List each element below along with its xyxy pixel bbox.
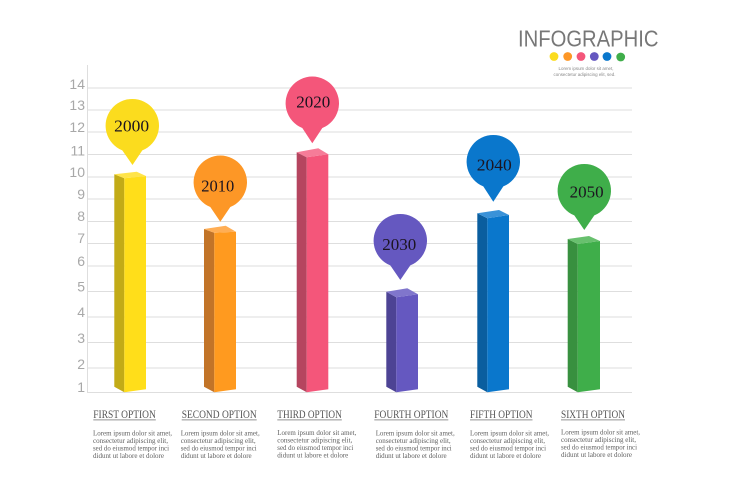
description: sed do eiusmod tempor inci (561, 442, 637, 452)
description: consectetur adipiscing elit, (181, 436, 256, 445)
option: second (181, 409, 260, 460)
description: didunt ut labore et dolore (181, 451, 252, 460)
y axis labels: 11 (70, 142, 85, 158)
pin: 2040 (467, 135, 520, 202)
description: didunt ut labore et dolore (561, 450, 633, 459)
option: fourth (374, 409, 455, 460)
bar: first option (114, 172, 146, 392)
y axis labels: 2 (77, 356, 85, 372)
title caption (554, 66, 616, 78)
bar: fourth option (386, 288, 418, 392)
pin: 2010 (194, 156, 247, 222)
description: Lorem ipsum dolor sit amet, (277, 428, 356, 437)
description: Lorem ipsum dolor sit amet, (470, 428, 549, 438)
description: didunt ut labore et dolore (470, 451, 542, 460)
y axis labels: 12 (69, 119, 85, 135)
pin: 2030: 2030 (382, 235, 416, 254)
pin: 2010: 2010 (201, 177, 234, 196)
option: third (277, 409, 356, 460)
description: Lorem ipsum dolor sit amet, (561, 428, 640, 436)
heading: FIRST OPTION (93, 409, 156, 421)
pin: 2000: 2000 (114, 116, 149, 136)
y axis labels: 3 (77, 330, 85, 346)
bar: second option (204, 226, 236, 392)
y axis labels: 7 (77, 230, 85, 246)
description (376, 428, 455, 460)
y axis labels: 13 (69, 97, 85, 113)
heading: THIRD OPTION (277, 409, 342, 421)
description (181, 428, 260, 460)
pin: 2020: 2020 (296, 92, 330, 111)
title caption: consectetur adipiscing elit, sed. (554, 72, 616, 78)
pin: 2050: 2050 (570, 183, 604, 202)
description: sed do eiusmod tempor inci (277, 443, 353, 452)
bar: third option (297, 148, 328, 392)
y axis labels: 14 (69, 76, 85, 92)
title block (518, 26, 659, 78)
heading: FOURTH OPTION (374, 409, 449, 421)
description (470, 428, 549, 460)
colour dots (550, 52, 625, 61)
description: sed do eiusmod tempor inci (376, 444, 452, 452)
description: consectetur adipiscing elit, (470, 436, 545, 445)
title: INFOGRAPHIC (518, 26, 659, 52)
description: Lorem ipsum dolor sit amet, (93, 428, 172, 438)
description: didunt ut labore et dolore (93, 451, 165, 460)
y axis labels: 5 (77, 279, 85, 295)
description (277, 428, 356, 460)
pin: 2020 (286, 77, 339, 143)
description: Lorem ipsum dolor sit amet, (181, 428, 260, 438)
y axis labels: 9 (77, 186, 85, 202)
heading: FIFTH OPTION (470, 409, 533, 421)
description: Lorem ipsum dolor sit amet, (376, 428, 455, 438)
y axis labels: 1 (77, 379, 85, 395)
description: consectetur adipiscing elit, (376, 436, 451, 445)
description (561, 428, 640, 459)
y axis labels: 8 (77, 208, 85, 224)
y axis labels: 6 (77, 253, 85, 269)
description: consectetur adipiscing elit, (93, 436, 168, 445)
pin: 2000 (106, 99, 159, 165)
description: consectetur adipiscing elit, (277, 436, 352, 444)
description: didunt ut labore et dolore (376, 451, 447, 460)
description: sed do eiusmod tempor inci (181, 444, 257, 452)
heading: SECOND OPTION (182, 409, 257, 421)
chart grid and axis (87, 65, 632, 393)
option: first (93, 409, 172, 460)
pin: 2030 (374, 214, 427, 280)
description: sed do eiusmod tempor inci (93, 444, 169, 452)
y axis labels: 4 (77, 304, 85, 320)
option: sixth (561, 409, 640, 459)
description: consectetur adipiscing elit, (561, 435, 636, 444)
heading: SIXTH OPTION (561, 409, 626, 421)
bar: sixth option (568, 236, 600, 392)
pin: 2050 (558, 164, 611, 230)
option: fifth (470, 409, 549, 460)
bar: fifth option (477, 210, 509, 392)
description: didunt ut labore et dolore (277, 450, 349, 460)
description (93, 428, 172, 460)
y axis labels (69, 76, 85, 395)
title caption: Lorem ipsum dolor sit amet, (558, 66, 614, 72)
y axis labels: 10 (69, 164, 85, 180)
pin: 2040: 2040 (477, 156, 512, 175)
description: sed do eiusmod tempor inci (470, 444, 546, 452)
